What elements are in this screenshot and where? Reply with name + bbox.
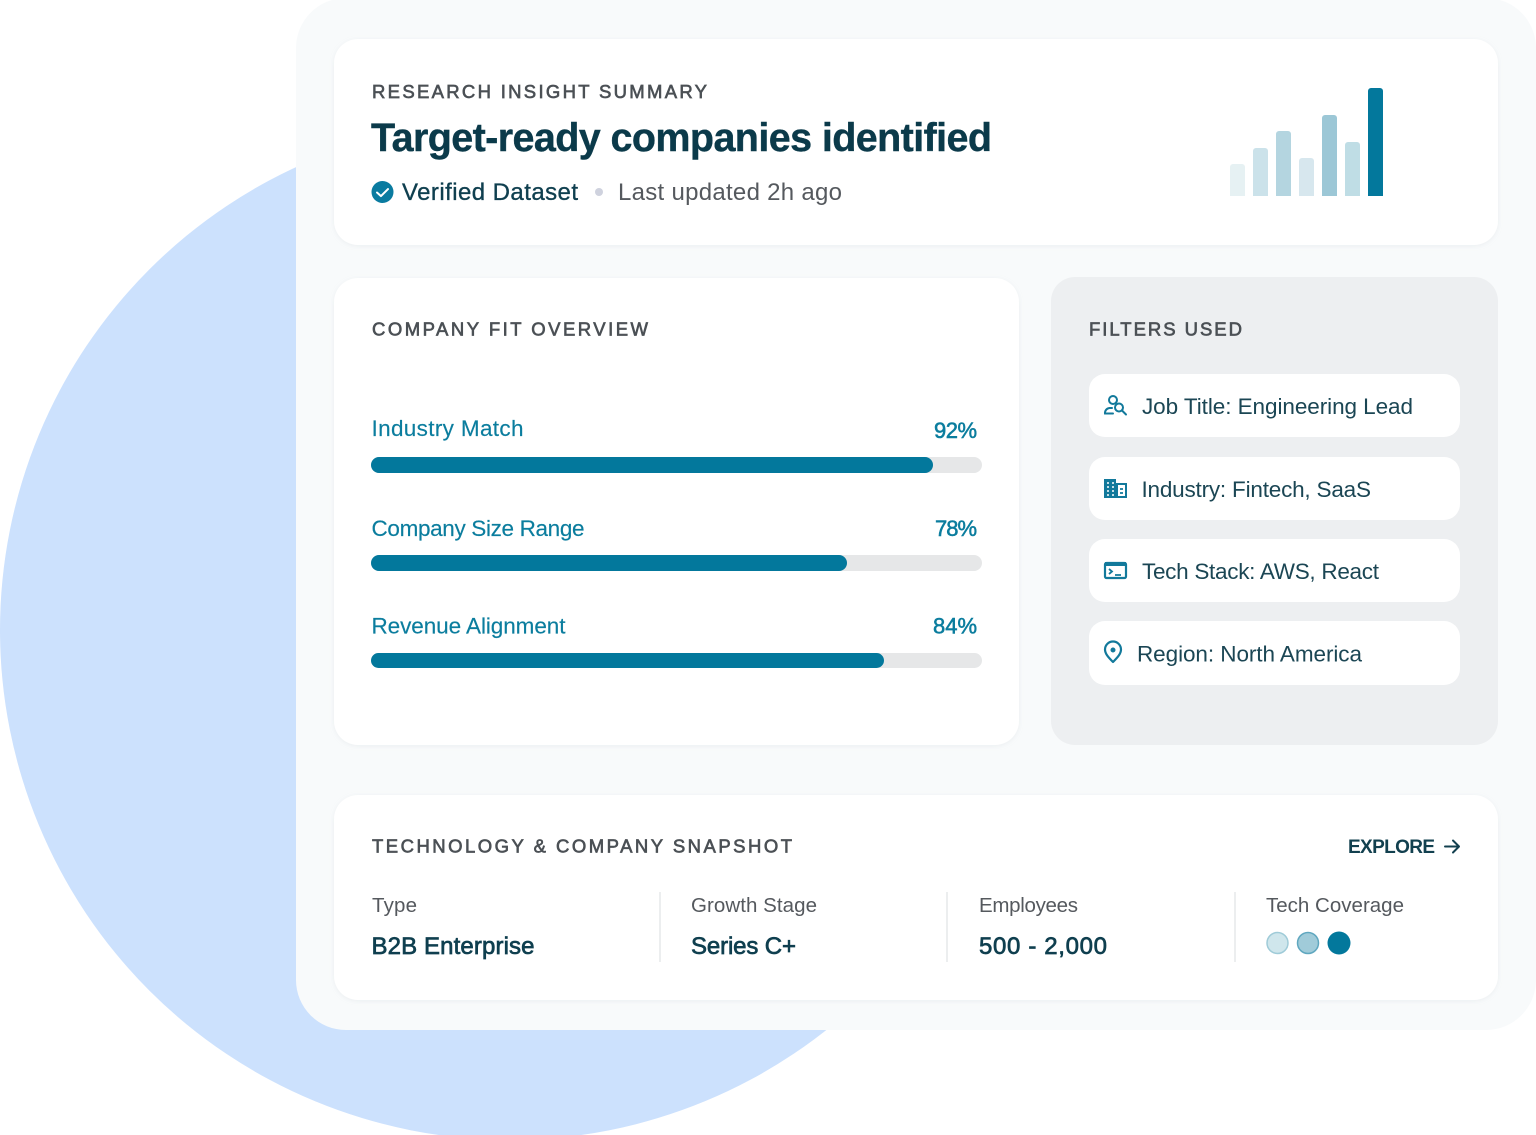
filter: industry: Industry: Fintech, SaaS bbox=[1142, 477, 1371, 502]
outer panel bbox=[296, 0, 1536, 1030]
stat: type bbox=[372, 894, 534, 960]
metric: revenue alignment bbox=[371, 614, 982, 668]
stat: tech coverage bbox=[1266, 894, 1404, 954]
metric: company size range: 78% bbox=[935, 516, 977, 541]
icon: verified check bbox=[372, 181, 394, 203]
metric: company size range bbox=[371, 516, 982, 571]
last updated label: Last updated 2h ago bbox=[618, 179, 842, 206]
stat: type: B2B Enterprise bbox=[372, 933, 534, 960]
metric: industry match: Industry Match bbox=[372, 416, 524, 441]
icon: terminal bbox=[1105, 562, 1126, 578]
filter: tech stack bbox=[1089, 539, 1460, 602]
panel: technology and company snapshot bbox=[334, 795, 1498, 1000]
panel: company fit overview bbox=[334, 278, 1019, 745]
filter: region: Region: North America bbox=[1137, 642, 1362, 666]
heading: FILTERS USED bbox=[1089, 318, 1242, 340]
filter: job title: Job Title: Engineering Lead bbox=[1142, 394, 1413, 419]
explore link: EXPLORE bbox=[1348, 837, 1435, 858]
stat: employees: 500 - 2,000 bbox=[979, 933, 1107, 960]
stat: growth stage: Series C+ bbox=[691, 933, 796, 960]
filter: tech stack: Tech Stack: AWS, React bbox=[1142, 559, 1380, 584]
metric: industry match bbox=[371, 416, 982, 473]
stat: growth stage bbox=[691, 894, 817, 960]
heading: COMPANY FIT OVERVIEW bbox=[372, 318, 649, 340]
title: Target-ready companies identified bbox=[371, 116, 992, 160]
mini bar chart bbox=[1230, 88, 1383, 196]
metric: company size range: Company Size Range bbox=[372, 516, 584, 541]
stat: type: Type bbox=[372, 894, 417, 917]
filter: job title bbox=[1089, 374, 1460, 437]
stat: employees: Employees bbox=[979, 894, 1078, 917]
stat: employees bbox=[979, 894, 1107, 960]
metric: revenue alignment: Revenue Alignment bbox=[372, 614, 566, 638]
panel: research insight summary bbox=[334, 39, 1498, 245]
stat: growth stage: Growth Stage bbox=[691, 894, 817, 917]
panel: filters used bbox=[1051, 277, 1498, 745]
separator dot bbox=[595, 188, 603, 196]
metric: industry match: 92% bbox=[934, 418, 977, 443]
stat: tech coverage: Tech Coverage bbox=[1266, 894, 1404, 917]
background circle bbox=[0, 120, 1020, 1135]
icon: person search bbox=[1105, 396, 1126, 414]
icon: building bbox=[1104, 479, 1127, 498]
icon: location pin bbox=[1105, 642, 1121, 662]
filter: region bbox=[1089, 621, 1460, 685]
filter: industry bbox=[1089, 457, 1460, 520]
metric: revenue alignment: 84% bbox=[933, 614, 977, 638]
verified label: Verified Dataset bbox=[402, 179, 578, 206]
eyebrow heading: RESEARCH INSIGHT SUMMARY bbox=[372, 81, 707, 102]
heading: TECHNOLOGY & COMPANY SNAPSHOT bbox=[372, 836, 792, 856]
